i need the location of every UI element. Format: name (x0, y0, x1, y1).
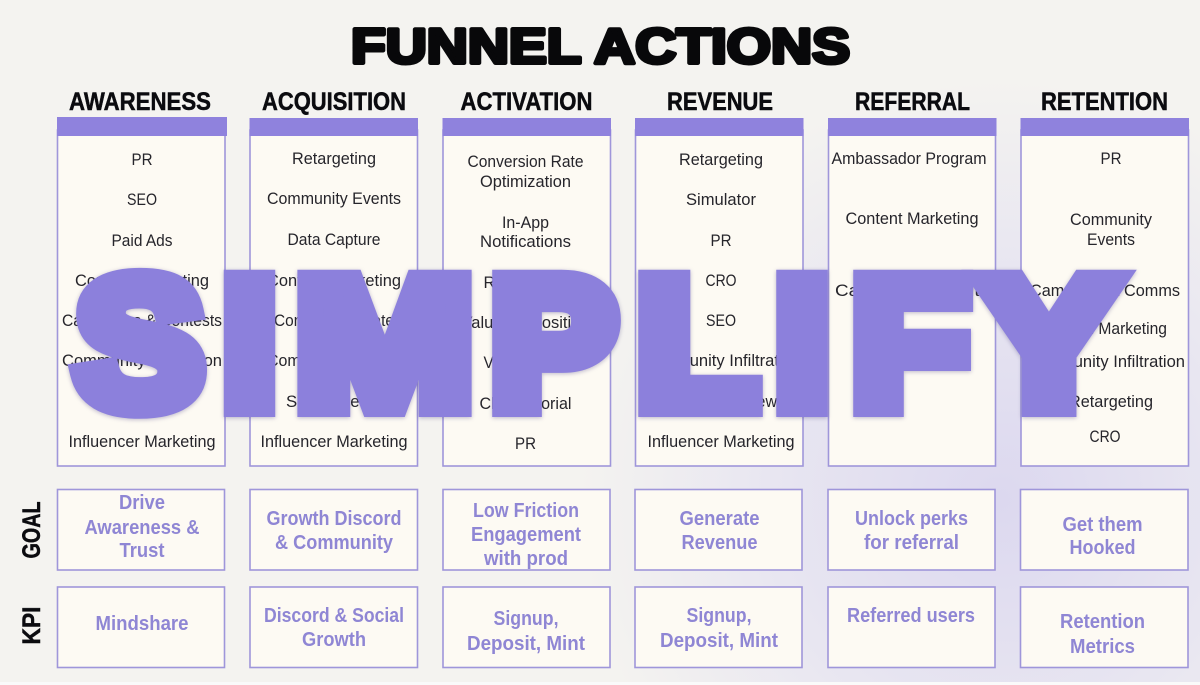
overlay word: SIMPLIFY: S (76, 241, 203, 445)
action list: activation: In-App (502, 214, 549, 232)
kpi: referral: Referred users (847, 605, 975, 627)
action list: activation: Video Demo (484, 354, 568, 372)
action list: referral: Content Marketing (846, 210, 978, 228)
action list: activation (462, 153, 590, 453)
action list: referral: Ambassador Program (832, 150, 986, 168)
list box: awareness (58, 130, 225, 466)
goal: acquisition: & Community (275, 532, 394, 554)
action list: revenue (641, 151, 801, 451)
action list: revenue: Community Infiltration (641, 352, 801, 370)
row label: goal: GOAL (18, 502, 46, 558)
list box: retention (1021, 130, 1188, 466)
overlay word: SIMPLIFY: M (296, 241, 473, 445)
action list: awareness: Paid Ads (112, 232, 172, 250)
action list: revenue: CRO (706, 272, 737, 290)
action list: revenue: Influencer Marketing (648, 433, 794, 451)
action list: retention: Community Infiltration (1025, 353, 1185, 371)
goal: awareness (58, 490, 224, 570)
kpi: acquisition: Discord & Social (264, 605, 404, 627)
action list: awareness: SEO (127, 191, 157, 209)
list box: activation (443, 130, 610, 466)
action list: acquisition (260, 150, 408, 451)
overlay word: SIMPLIFY (76, 241, 1118, 445)
action list: awareness: Content Marketing (75, 272, 209, 290)
action list: acquisition: Company Update (274, 312, 394, 330)
action list: activation: Notifications (480, 233, 571, 251)
goal: awareness: Drive (119, 492, 165, 514)
action list: retention: CRO (1090, 428, 1121, 446)
action list: acquisition: Influencer Marketing (260, 433, 408, 451)
action list: referral: Campaign Results (835, 282, 989, 300)
action list: acquisition: Community Events (267, 352, 401, 370)
panel: referral (828, 88, 996, 466)
action list: acquisition: Retargeting (292, 150, 376, 168)
action list: awareness (62, 151, 222, 451)
action list: activation: Value Proposition (462, 314, 590, 332)
goal row (58, 490, 1188, 570)
goal: activation: Low Friction (473, 500, 579, 522)
kpi: acquisition: Growth (302, 629, 366, 651)
kpi: awareness (58, 587, 224, 668)
action list: activation: Optimization (480, 173, 571, 191)
kpi row (58, 587, 1188, 668)
goal: referral: Unlock perks (855, 508, 968, 530)
action list: retention: Community (1070, 211, 1153, 229)
kpi: referral (828, 587, 995, 668)
action list: retention: Retargeting (1069, 393, 1153, 411)
heading: activation: ACTIVATION (460, 88, 592, 116)
action list: acquisition: Data Capture (288, 231, 380, 249)
overlay word: SIMPLIFY: I (775, 241, 829, 445)
action list: revenue: SEO (706, 312, 736, 330)
action list: activation: PR (515, 435, 536, 453)
kpi: activation: Signup, (494, 608, 558, 630)
kpi: revenue: Signup, (686, 605, 752, 627)
action list: acquisition: Community Events (267, 190, 401, 208)
goal: acquisition (250, 490, 418, 570)
header bar: activation (442, 118, 611, 136)
action list: awareness: Influencer Marketing (68, 433, 216, 451)
action list: referral (832, 150, 989, 300)
panel: revenue (635, 88, 804, 466)
action list: activation: Click Tutorial (480, 395, 572, 413)
heading: acquisition: ACQUISITION (262, 88, 406, 116)
kpi: awareness: Mindshare (96, 613, 188, 635)
goal: retention (1020, 490, 1188, 570)
action list: revenue: PR (710, 232, 732, 250)
action list: revenue: Simulator (686, 191, 756, 209)
overlay word: SIMPLIFY: I (222, 241, 276, 445)
kpi: retention (1020, 587, 1188, 668)
header bar: acquisition (250, 118, 418, 136)
panel: activation (442, 88, 611, 466)
kpi: revenue (635, 587, 802, 668)
heading: awareness: AWARENESS (69, 88, 211, 116)
header bar: awareness (57, 117, 227, 136)
panel: acquisition (250, 88, 418, 466)
action list: retention: Events (1087, 231, 1135, 249)
goal: acquisition: Growth Discord (266, 508, 402, 530)
heading: referral: REFERRAL (855, 88, 970, 116)
action list: retention: PR (1100, 150, 1122, 168)
header bar: retention (1020, 118, 1189, 136)
panel: awareness (57, 88, 227, 466)
goal: referral: for referral (864, 532, 959, 554)
goal: awareness: Awareness & (84, 517, 200, 539)
action list: awareness: Campaigns & Contests (62, 312, 222, 330)
action list: awareness: PR (132, 151, 153, 169)
goal: awareness: Trust (120, 540, 165, 562)
kpi: acquisition (250, 587, 418, 668)
action list: revenue: Retargeting (679, 151, 763, 169)
action list: activation: Retargeting (484, 274, 568, 292)
overlay word: SIMPLIFY: F (852, 241, 969, 445)
list box: referral (828, 130, 996, 466)
action list: awareness: Community Infiltration (62, 352, 222, 370)
title: FUNNEL ACTIONS (351, 20, 850, 74)
action list: retention: Email Marketing (1055, 320, 1167, 338)
overlay word: SIMPLIFY: L (637, 241, 757, 445)
kpi: activation (443, 587, 610, 668)
action list: activation: Conversion Rate (468, 153, 584, 171)
kpi: revenue: Deposit, Mint (660, 630, 778, 652)
goal: revenue (635, 490, 802, 570)
goal: revenue: Generate (680, 508, 760, 530)
overlay word: SIMPLIFY: P (491, 241, 616, 445)
goal: activation (443, 490, 610, 570)
goal: activation: with prod (483, 548, 568, 570)
goal: retention: Get them (1062, 514, 1142, 536)
goal: retention: Hooked (1070, 537, 1136, 559)
list box: acquisition (250, 130, 418, 466)
action list: retention: Campaign & Comms (1030, 282, 1180, 300)
header bar: referral (828, 118, 996, 136)
goal: activation: Engagement (471, 524, 581, 546)
action list: revenue: Product Review (665, 393, 777, 411)
overlay word: SIMPLIFY: Y (980, 241, 1118, 445)
panel: retention (1020, 88, 1189, 466)
kpi: retention: Retention (1060, 611, 1145, 633)
heading: revenue: REVENUE (667, 88, 773, 116)
kpi: retention: Metrics (1070, 636, 1135, 658)
action list: acquisition: Content Marketing (267, 272, 401, 290)
action list: retention (1025, 150, 1185, 446)
list box: revenue (636, 130, 803, 466)
header bar: revenue (635, 118, 804, 136)
kpi: activation: Deposit, Mint (467, 633, 585, 655)
goal: referral (828, 490, 995, 570)
heading: retention: RETENTION (1041, 88, 1168, 116)
goal: revenue: Revenue (682, 532, 758, 554)
action list: acquisition: Social Media (286, 393, 383, 411)
row label: kpi: KPI (18, 606, 46, 644)
